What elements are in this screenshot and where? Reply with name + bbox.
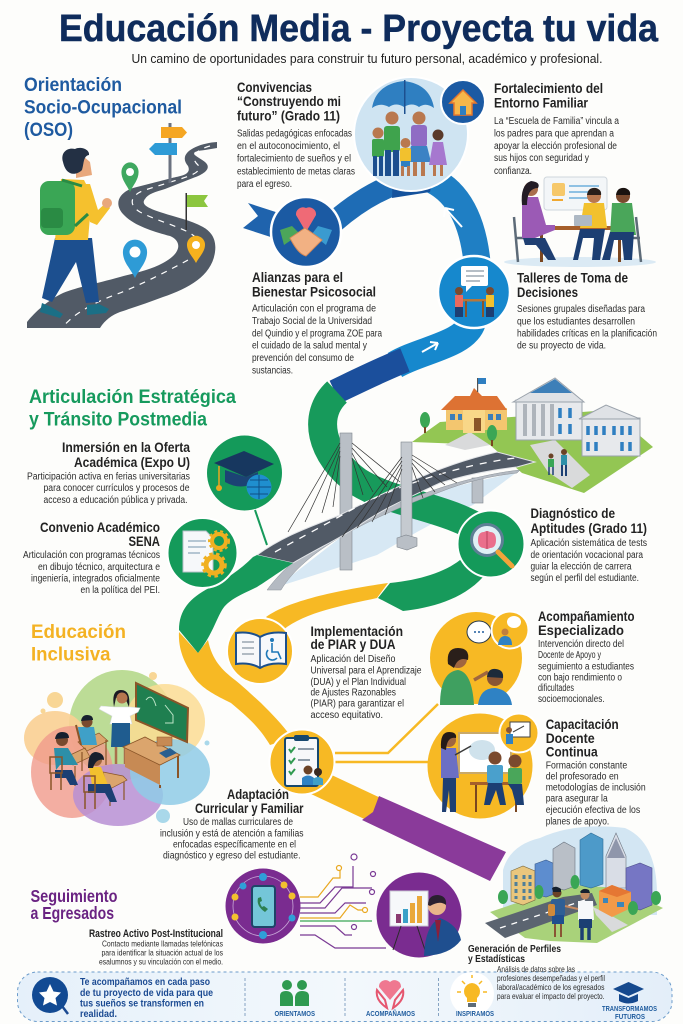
icon: handshake — [271, 197, 341, 267]
body text — [517, 304, 657, 352]
heading: SENA — [128, 534, 160, 549]
icon: brain magnifier circle — [458, 510, 524, 578]
body text: ingeniería, integrados oficialmente — [31, 574, 160, 584]
body text: Articulación con el programa de — [252, 304, 376, 314]
body text: profesiones desempeñadas y el perfil — [497, 973, 605, 983]
label: orientamos: ORIENTAMOS — [274, 1009, 315, 1018]
panel: Implementación de PIAR y DUA — [310, 624, 422, 721]
body text — [23, 550, 160, 596]
footer banner — [18, 972, 672, 1022]
heading: Orientación — [24, 75, 122, 96]
body text — [497, 964, 605, 1001]
body text: para evaluar el impacto del proyecto. — [497, 991, 604, 1001]
body text: para asegurar la — [546, 794, 608, 804]
body text: planes de apoyo. — [546, 816, 609, 828]
heading: Socio-Ocupacional — [24, 98, 182, 118]
body text — [99, 938, 223, 966]
heading: Especializado — [538, 623, 624, 638]
icon: phone network circle — [226, 868, 300, 944]
ribbon path: blue stage — [243, 172, 477, 392]
icon: inspiramos light bulb — [450, 972, 494, 1016]
heading: Seguimiento a Egresados: a Egresados — [30, 903, 114, 923]
label: acompañamos: ACOMPAÑAMOS — [366, 1009, 415, 1018]
icon: graduation cap circle — [207, 436, 282, 545]
panel: Convivencias — [237, 80, 355, 190]
body text: apoyar la elección profesional de — [494, 141, 617, 152]
body text: socioemocionales. — [538, 694, 604, 705]
motto text: realidad. — [80, 1008, 117, 1020]
ribbon path: purple stage — [362, 796, 506, 881]
subtitle: Un camino de oportunidades para construir tu futuro personal, académico y profesional. — [132, 51, 602, 66]
body text: laboral/académico de los egresados — [497, 982, 604, 992]
heading: Acompañamiento — [538, 609, 634, 624]
illustration: city and graduates — [485, 826, 663, 943]
label: transformamos futuros: TRANSFORMAMOS — [602, 1004, 657, 1013]
heading — [530, 506, 647, 536]
heading — [517, 270, 628, 300]
body text: acceso equitativo. — [310, 710, 383, 721]
heading: de PIAR y DUA — [310, 637, 396, 652]
heading — [237, 80, 341, 124]
heading: Rastreo Activo Post-Institucional — [89, 928, 223, 940]
icon: speech person small circle — [492, 612, 528, 648]
body text: La “Escuela de Familia” vincula a — [494, 116, 619, 127]
heading — [62, 440, 190, 470]
student with backpack — [40, 148, 112, 318]
heading: Continua — [546, 744, 598, 760]
body text: guiar la elección de carrera — [530, 562, 632, 572]
heading: Convivencias — [237, 80, 312, 95]
signpost — [149, 123, 187, 183]
heading: Bienestar Psicosocial — [252, 284, 376, 300]
body text: según el perfil del estudiante. — [530, 573, 639, 584]
motto text: Te acompañamos en cada paso — [80, 976, 210, 988]
body text: en dibujo técnico, arquitectura e — [38, 562, 160, 573]
icon: teacher training circle — [428, 714, 532, 818]
body text: sustancias. — [252, 366, 293, 376]
heading: Capacitación — [546, 717, 619, 732]
body text: (DUA) y el Plan Individual — [310, 677, 406, 688]
heading: Diagnóstico de — [530, 506, 615, 521]
heading: Articulación Estratégica: Articulación Estratégica — [29, 386, 236, 408]
body text: Aplicación del Diseño — [310, 654, 396, 665]
icon: acompañamos heart and hands — [377, 980, 403, 1008]
heading: Generación de Perfiles — [468, 943, 561, 955]
heading — [546, 717, 619, 760]
heading: Seguimiento a Egresados: Seguimiento — [30, 886, 118, 906]
winding road — [27, 142, 217, 328]
body text: los padres para que aprendan a — [494, 128, 614, 140]
body text: Análisis de datos sobre las — [497, 964, 575, 974]
body text: Salidas pedagógicas enfocadas — [237, 128, 352, 140]
body text: sus hijos con seguridad y — [494, 153, 589, 164]
body text: acceso a educación pública y privada. — [44, 495, 188, 506]
icon: teacher support circle — [430, 612, 522, 705]
motto text: de tu proyecto de vida para que — [80, 987, 213, 999]
panel: Generación de Perfiles y Estadísticas — [468, 943, 605, 1001]
body text: Articulación con programas técnicos — [23, 550, 160, 561]
icon: book with accessibility symbol — [227, 618, 293, 684]
heading: “Construyendo mi — [237, 94, 341, 109]
heading — [468, 943, 561, 965]
illustration: university campus — [412, 378, 653, 493]
heading — [252, 270, 376, 300]
heading: Talleres de Toma de — [517, 270, 628, 286]
heading: Convenio Académico — [40, 520, 160, 535]
body text: para el egreso. — [237, 179, 292, 190]
panel: Inmersión en la Oferta Académica — [27, 440, 190, 506]
body text: fortalecimiento de sueños y el — [237, 154, 351, 164]
body text — [494, 116, 619, 177]
heading — [40, 520, 160, 549]
body text: Docente de Apoyo y — [538, 650, 601, 661]
panel: Capacitación Docente Continua — [546, 717, 646, 828]
body text — [310, 654, 422, 721]
body text: Participación activa en ferias universitarias — [27, 472, 190, 482]
heading — [24, 75, 182, 141]
title: Educación Media - Proyecta tu vida — [59, 8, 659, 50]
icon: family under umbrella — [354, 77, 468, 191]
body text: Trabajo Social de la Universidad — [252, 316, 372, 327]
panel: Fortalecimiento del Entorno Familiar — [494, 81, 619, 177]
heading: Adaptación — [227, 787, 289, 802]
icon: workshop circle — [438, 256, 510, 328]
body text: Intervención directo del — [538, 639, 624, 650]
heading: futuro” (Grado 11) — [237, 108, 340, 124]
icon: star badge — [32, 977, 68, 1014]
body text: enfocadas específicamente en el — [173, 840, 296, 850]
heading: Fortalecimiento del — [494, 81, 603, 96]
panel: Diagnóstico de Aptitudes — [530, 506, 647, 584]
heading: Decisiones — [517, 285, 578, 300]
bridge river — [273, 472, 517, 590]
label: transformamos futuros: FUTUROS — [615, 1012, 645, 1021]
icon: orientamos people — [280, 980, 309, 1006]
heading: Articulación Estratégica: y Tránsito Postmedia — [29, 408, 207, 430]
icon: statistics presentation circle — [376, 872, 462, 958]
heading — [310, 624, 403, 652]
icon: whiteboard small circle — [500, 714, 538, 752]
map pins — [121, 162, 205, 278]
body text: inclusión y está de atención a familias — [160, 828, 304, 840]
motto text — [80, 976, 213, 1020]
heading: Entorno Familiar — [494, 96, 589, 110]
panel: Orientación Socio-Ocupacional — [24, 75, 217, 328]
body text — [237, 128, 355, 190]
body text: en la política del PEI. — [80, 585, 160, 596]
heading — [538, 609, 634, 638]
ribbon path: green stage — [323, 392, 490, 611]
illustration: inclusive classroom — [24, 670, 210, 826]
body text: Formación constante — [546, 760, 628, 772]
icon: circuit connector lines — [300, 854, 386, 948]
heading: Docente — [546, 731, 595, 746]
label: inspiramos: INSPIRAMOS — [456, 1009, 494, 1018]
body text: ejecución efectiva de los — [546, 805, 640, 816]
panel: Talleres de Toma de Decisiones — [517, 270, 657, 352]
heading: Inmersión en la Oferta — [62, 440, 190, 455]
body text — [252, 304, 382, 376]
body text: para identificar la situación actual de los — [102, 948, 223, 958]
illustration: cable-stayed bridge — [257, 433, 535, 590]
ribbon path: green band over bridge — [179, 555, 293, 653]
body text: de orientación vocacional para — [530, 550, 643, 561]
heading: Seguimiento a Egresados — [30, 886, 118, 923]
heading: Implementación — [310, 624, 403, 639]
panel: Adaptación Curricular y Familiar — [160, 787, 304, 862]
heading: (OSO) — [24, 120, 73, 141]
body text: Contacto mediante llamadas telefónicas — [102, 938, 223, 948]
icon: house — [441, 80, 485, 124]
heading: Educación Inclusiva: Educación — [31, 621, 126, 643]
body text: de Ajustes Razonables — [310, 688, 396, 698]
panel: Alianzas para el Bienestar Psicosocial — [252, 270, 382, 376]
body text: metodologías de inclusión — [546, 782, 646, 794]
body text — [546, 760, 646, 828]
heading: Articulación Estratégica — [29, 386, 236, 430]
heading: Alianzas para el — [252, 270, 343, 285]
heading: Educación Inclusiva: Inclusiva — [31, 644, 111, 666]
body text: para conocer currículos y procesos de — [44, 483, 190, 494]
body text: Uso de mallas curriculares de — [183, 817, 293, 828]
panel: Acompañamiento Especializado — [538, 609, 634, 705]
body text — [530, 538, 647, 584]
heading — [494, 81, 603, 110]
body text: diagnóstico y egreso del estudiante. — [163, 850, 300, 862]
body text — [538, 639, 634, 705]
motto text: tus sueños se transformen en — [80, 998, 204, 1010]
body text — [27, 472, 190, 506]
body text: que los estudiantes desarrollen — [517, 316, 635, 328]
heading — [195, 787, 304, 816]
body text: dificultades — [538, 683, 574, 694]
body text: (PIAR) para garantizar el — [310, 698, 404, 710]
body text: seguimiento a estudiantes — [538, 662, 634, 672]
body text: Sesiones grupales diseñadas para — [517, 304, 645, 315]
ribbon path: yellow stage — [179, 583, 438, 812]
body text: con bajo rendimiento o — [538, 672, 622, 684]
heading: Académica (Expo U) — [74, 455, 190, 470]
body text: establecimiento de metas claras — [237, 166, 355, 178]
heading: Aptitudes (Grado 11) — [530, 521, 647, 536]
icon: clipboard circle — [270, 730, 334, 794]
body text: de su proyecto de vida. — [517, 340, 606, 352]
heading: Educación Inclusiva — [31, 621, 126, 666]
illustration: decision workshop meeting — [504, 177, 656, 267]
body text: Aplicación sistemática de tests — [530, 538, 647, 549]
label: transformamos futuros — [602, 1004, 657, 1021]
flag — [186, 193, 208, 230]
heading: Curricular y Familiar — [195, 801, 304, 816]
heading: y Estadísticas — [468, 953, 525, 965]
panel: Rastreo Activo Post-Institucional — [89, 928, 223, 966]
body text: prevención del consumo de — [252, 353, 354, 364]
panel: Convenio Académico SENA — [23, 520, 160, 596]
body text: del Quindio y el programa ZOE para — [252, 328, 382, 340]
body text: Universal para el Aprendizaje — [310, 666, 422, 676]
body text: esalumnos y su vinculación con el medio. — [99, 956, 223, 966]
body text: el cuidado de la salud mental y — [252, 340, 367, 352]
body text: habilidades críticas en la planificación — [517, 328, 657, 340]
icon: document and gears circle — [168, 518, 238, 588]
body text — [160, 817, 304, 862]
body text: del profesorado en — [546, 772, 619, 782]
body text: confianza. — [494, 166, 532, 177]
body text: en el autoconocimiento, el — [237, 141, 340, 152]
icon: transformamos graduation cap — [613, 982, 644, 1004]
